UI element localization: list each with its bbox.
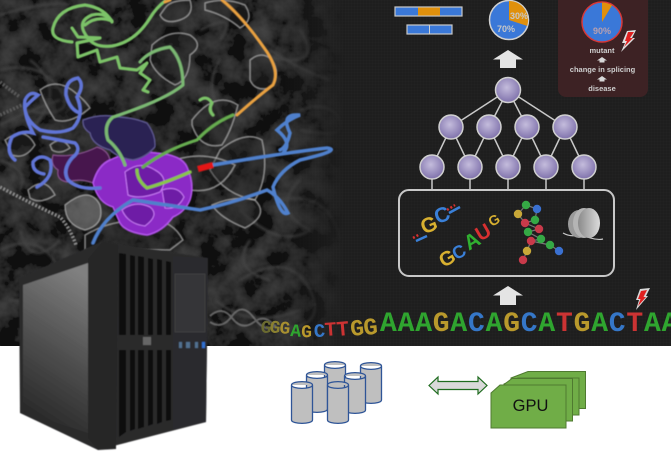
arrow: storage to GPU [429, 377, 487, 394]
main sequence letters: T [556, 309, 573, 340]
icon: nucleosome spool [563, 208, 603, 239]
computer tower [19, 241, 208, 450]
front corner edge [88, 241, 118, 450]
cylinder [292, 382, 312, 423]
mutation pathway text: mutant [590, 46, 615, 55]
icon: GCAUG motif: G [485, 210, 503, 230]
cylinder [360, 363, 382, 403]
GPU label: GPU [513, 397, 548, 415]
side panel [23, 263, 88, 433]
neural network [420, 78, 596, 190]
network nodes [420, 78, 596, 179]
grey protein blobs [5, 0, 277, 250]
exon bar: three segments [395, 7, 462, 16]
arrow: network to output [493, 50, 523, 68]
right front panel [173, 256, 208, 430]
icon: GC hairpin motif: G [417, 212, 441, 239]
GPU card [498, 378, 572, 421]
panel: sequence feature box [399, 190, 614, 276]
grey rope strands [0, 82, 76, 245]
green ribbon [53, 1, 233, 188]
pie chart: 70 / 30: 70% [497, 24, 515, 34]
main sequence letters: A [591, 309, 608, 340]
main sequence letters: G [574, 309, 590, 340]
blue left ribbon [9, 78, 100, 188]
pie chart: 70 / 30: 30% [510, 11, 528, 21]
slanted leading letters: G [349, 316, 365, 343]
main sequence letters: A [538, 309, 555, 340]
main sequence letters: T [626, 309, 643, 340]
icon: lightning above sequence [636, 288, 650, 310]
cylinder [324, 362, 346, 402]
orange ribbon [165, 0, 275, 115]
front IO lights [179, 342, 205, 348]
slanted leading letters: T [336, 319, 350, 343]
logo [143, 337, 151, 345]
icon: GCAUG motif: U [472, 220, 495, 246]
GPU card [504, 378, 579, 415]
cylinder [328, 382, 348, 423]
icon: bead structure [514, 201, 563, 264]
protein and RNA illustration [0, 0, 331, 250]
icon: GCAUG motif: C [448, 240, 470, 264]
main sequence letters: A [415, 309, 432, 340]
slanted leading letters: G [268, 318, 282, 339]
icon: GCAUG motif: A [460, 228, 485, 255]
faint molecular tangle background [0, 4, 342, 330]
cylinder [344, 373, 366, 413]
icon: GCAUG motif [435, 210, 503, 272]
slanted leading letters: A [290, 322, 302, 343]
mutation pathway text: disease [588, 84, 616, 93]
main sequence letters: C [609, 309, 626, 340]
blue right ribbon [93, 115, 331, 243]
main sequence letters: A [380, 309, 397, 340]
panel: mutant effect [558, 0, 648, 97]
main sequence letters: A [450, 309, 467, 340]
magenta protein blob [52, 147, 110, 183]
main sequence letters: C [468, 309, 485, 340]
dark background panel [0, 0, 671, 346]
purple protein blob [93, 152, 192, 235]
main sequence letters: C [521, 309, 538, 340]
faded helix leading into sequence [210, 309, 276, 328]
main sequence letters: G [433, 309, 450, 340]
main sequence letters: A [398, 309, 415, 340]
slanted leading letters: G [362, 315, 379, 343]
slanted leading letters: G [278, 319, 291, 340]
slanted leading letters: C [313, 321, 326, 343]
DNA sequence [210, 309, 671, 343]
main sequence letters: A [486, 309, 503, 340]
icon: GC hairpin motif: C [431, 202, 454, 229]
GPU card stack [491, 372, 586, 428]
icon: lightning [621, 30, 636, 52]
slanted leading letters [259, 315, 379, 343]
icon: GC hairpin motif [413, 202, 460, 241]
main sequence letters: A [644, 309, 661, 340]
slanted leading letters: G [259, 318, 273, 339]
exon bar: two segments [407, 25, 452, 34]
mutation pathway text [570, 46, 636, 93]
red mutation segment [198, 165, 213, 169]
network connections [432, 90, 584, 190]
icon: GCAUG motif: G [435, 245, 460, 272]
main sequence letters: G [503, 309, 520, 340]
drive bays [175, 274, 205, 332]
GPU card: front [491, 385, 566, 428]
arrow: sequence to features [493, 286, 523, 305]
pie chart: 70 / 30 [490, 0, 528, 40]
mutation pathway text: change in splicing [570, 65, 636, 74]
case body [19, 241, 208, 450]
cylinder [306, 372, 328, 412]
navy protein blob [83, 116, 155, 160]
pie chart: 90%: 90% [593, 26, 611, 36]
front vents [119, 253, 171, 437]
slanted leading letters: T [324, 319, 337, 343]
slanted leading letters: G [301, 323, 312, 343]
storage cylinders [292, 362, 382, 423]
GPU card [511, 372, 586, 408]
